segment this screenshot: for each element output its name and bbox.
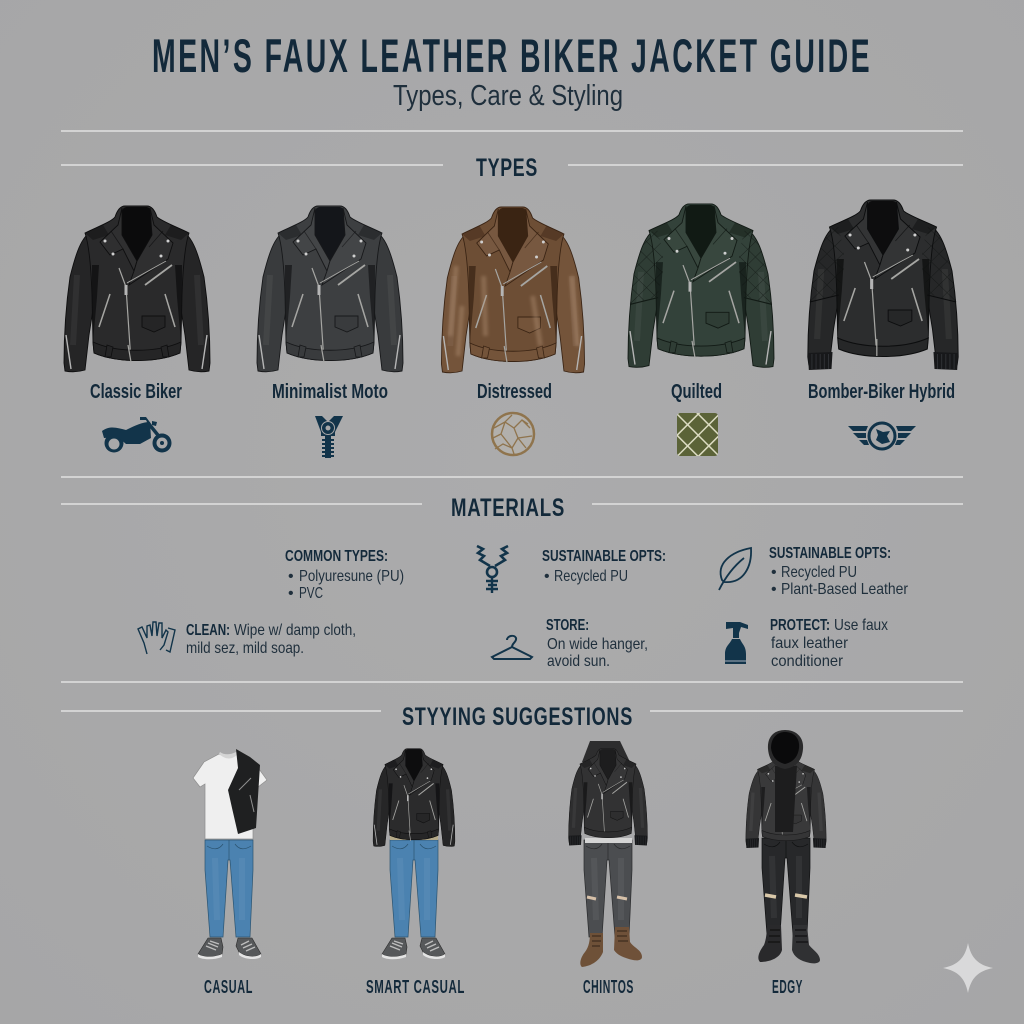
text: clean — [186, 622, 356, 657]
text: clean: mild sez, mild soap. — [186, 640, 304, 657]
jacket: bomber-biker hybrid — [808, 200, 958, 370]
text: clean: Wipe w/ damp cloth, — [234, 622, 356, 639]
label: quilted: Quilted — [671, 381, 722, 403]
icon: cracked leather — [492, 413, 534, 455]
label: edgy: EDGY — [772, 977, 803, 997]
outfit: smart casual — [373, 749, 455, 959]
text: common types: COMMON TYPES: — [285, 548, 388, 565]
label: distressed: Distressed — [477, 381, 552, 403]
text: store: avoid sun. — [547, 653, 610, 670]
icon: sparkle watermark — [943, 943, 993, 993]
subtitle: Types, Care & Styling — [393, 80, 623, 112]
text: sustainable options, plant-based: Plant-Based Leather — [781, 581, 909, 598]
text: sustainable options, recycled: Recycled PU — [554, 568, 628, 585]
text: common types: • — [288, 568, 294, 585]
text: store: STORE: — [546, 617, 589, 634]
text: sustainable options, plant-based: Recycled PU — [781, 564, 857, 581]
panel: materials and care — [138, 545, 909, 670]
panel: outfits — [193, 730, 826, 997]
text: protect: Use faux — [834, 617, 888, 634]
icon: leaf — [719, 548, 751, 590]
text: sustainable options, plant-based: • — [771, 581, 777, 598]
icon: zipper — [315, 416, 343, 458]
text: protect — [770, 617, 888, 670]
label: smart casual: SMART CASUAL — [366, 977, 465, 997]
jacket: quilted — [628, 204, 774, 367]
icon: hands — [138, 622, 175, 654]
text: sustainable options, plant-based: • — [771, 564, 777, 581]
text: sustainable options, recycled: SUSTAINABLE OPTS: — [542, 548, 666, 565]
icon: winged badge — [848, 423, 916, 449]
label: classic biker: Classic Biker — [90, 381, 182, 403]
label: minimalist moto: Minimalist Moto — [272, 381, 388, 403]
icon: hanger — [492, 636, 532, 659]
text: common types: Polyuresune (PU) — [299, 568, 404, 585]
jacket: classic biker — [64, 206, 210, 372]
jacket: minimalist moto — [257, 206, 403, 372]
heading: types: TYPES — [476, 154, 538, 182]
text: common types — [285, 548, 404, 602]
icon: spray bottle — [725, 622, 748, 664]
text: common types: • — [288, 585, 294, 602]
heading: styling suggestions: STYYING SUGGESTIONS — [402, 703, 633, 731]
label: chintos: CHINTOS — [583, 977, 634, 997]
label: bomber-biker hybrid: Bomber-Biker Hybrid — [808, 381, 955, 403]
text: store: On wide hanger, — [547, 636, 648, 653]
outfit: casual — [193, 749, 267, 959]
text: sustainable options, plant-based: SUSTAINABLE OPTS: — [769, 545, 891, 562]
text: protect: faux leather — [771, 635, 849, 652]
text: store — [546, 617, 648, 670]
icon: motorcycle — [102, 417, 172, 452]
outfit: edgy — [746, 730, 826, 963]
text: sustainable options, plant-based — [769, 545, 909, 598]
heading: materials: MATERIALS — [451, 494, 565, 522]
panel: jacket types — [64, 200, 958, 458]
text: sustainable options, recycled: • — [544, 568, 550, 585]
icon: quilted swatch — [677, 413, 718, 456]
icon: zipper pull — [477, 546, 508, 593]
outfit: chintos — [569, 741, 647, 967]
text: protect: conditioner — [771, 653, 844, 670]
text: sustainable options, recycled — [542, 548, 666, 585]
label: casual: CASUAL — [204, 977, 253, 997]
text: protect: PROTECT: — [770, 617, 830, 634]
text: clean: CLEAN: — [186, 622, 230, 639]
text: common types: PVC — [299, 585, 323, 602]
jacket: distressed — [441, 207, 585, 373]
